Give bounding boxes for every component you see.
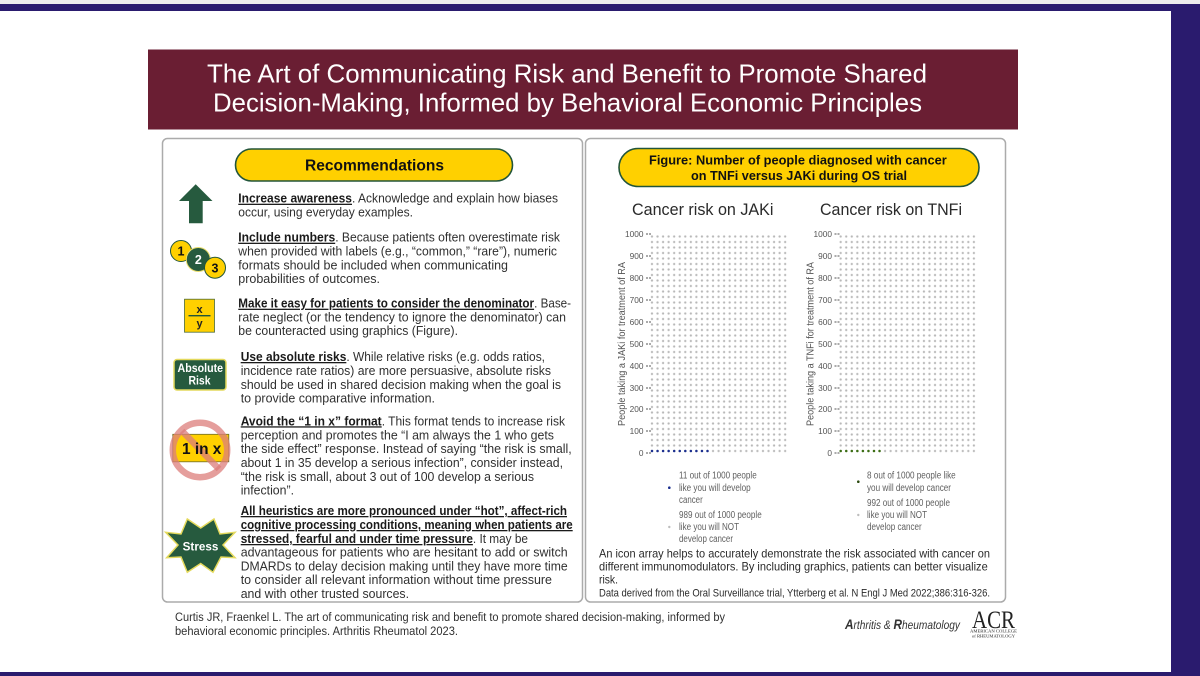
chart title: JAKi: Cancer risk on JAKi (632, 201, 774, 219)
text: avoid 1 in x: Avoid the “1 in x” format. This format tends to increase risk (241, 413, 566, 428)
heading: figure (619, 148, 979, 186)
icon array: TNFi (838, 234, 977, 454)
axis ticks: TNFi (814, 229, 840, 458)
legend: JAKi: develop cancer (679, 534, 734, 545)
heading: figure: on TNFi versus JAKi during OS trial (691, 168, 907, 183)
text: heuristics: All heuristics are more pronounced under “hot”, affect-rich (241, 503, 567, 518)
logo: ACR: AMERICAN COLLEGE (970, 628, 1017, 634)
legend: TNFi: you will develop cancer (867, 483, 952, 494)
text: avoid 1 in x (241, 413, 572, 498)
heading: recommendations: Recommendations (305, 158, 444, 174)
legend: JAKi: cancer (679, 495, 703, 506)
axis ticks: JAKi: 800 (630, 273, 644, 283)
panel: recommendations (162, 138, 582, 602)
text: include numbers: probabilities of outcomes. (238, 271, 380, 286)
legend: JAKi: 989 out of 1000 people (679, 510, 762, 521)
text: increase awareness: occur, using everyday examples. (238, 205, 413, 220)
text: figure caption: risk. (599, 573, 618, 587)
text: avoid 1 in x: about 1 in 35 develop a serious infection”, consider instead, (241, 455, 563, 470)
text: heuristics: cognitive processing conditions, meaning when patients are (241, 517, 573, 532)
text: citation: behavioral economic principles. Arthritis Rheumatol 2023. (175, 624, 458, 638)
legend: TNFi: 992 out of 1000 people (867, 498, 950, 509)
legend: JAKi: like you will develop (679, 483, 751, 494)
axis ticks: TNFi: 0 (827, 448, 832, 458)
panel: figure (586, 138, 1006, 602)
icon: absolute risk badge: Absolute (178, 362, 224, 375)
icon: numbers 1 2 3: 2 (195, 253, 202, 267)
text: avoid 1 in x: infection”. (241, 482, 294, 498)
heading: recommendations (236, 149, 512, 181)
text: heuristics (241, 503, 573, 601)
icon: numbers 1 2 3: 1 (178, 244, 185, 258)
axis ticks: JAKi: 300 (630, 383, 644, 393)
text: avoid 1 in x: the side effect” response. Instead of saying “the risk is small, (241, 441, 572, 456)
text: include numbers (237, 230, 561, 286)
text: denominator: rate neglect (or the tendency to ignore the denominator) can (238, 310, 566, 324)
axis ticks: JAKi: 700 (630, 295, 644, 305)
text: heuristics: DMARDs to delay decision making until they have more time (241, 558, 568, 574)
logo: ACR: of RHEUMATOLOGY (972, 634, 1016, 638)
text: citation: Curtis JR, Fraenkel L. The art of communicating risk and benefit to promote shared decision-making, informed by (175, 610, 726, 624)
text: absolute risks: should be used in shared decision making when the goal is (241, 377, 561, 392)
legend: JAKi: 11 out of 1000 people (679, 471, 757, 482)
axis ticks: TNFi: 600 (818, 317, 832, 327)
text: include numbers: Include numbers. Because patients often overestimate risk (238, 230, 561, 245)
text: denominator: Make it easy for patients to consider the denominator. Base- (238, 296, 571, 311)
axis ticks: JAKi: 1000 (625, 229, 644, 239)
text: heuristics: stressed, fearful and under time pressure. It may be (241, 531, 528, 546)
icon: stress starburst (166, 519, 235, 572)
icon: no 1 in x (173, 423, 229, 477)
text: absolute risks: incidence rate ratios) are more persuasive, absolute risks (241, 363, 551, 378)
text: figure caption: different immunomodulators. By including graphics, patients can better visualize (599, 560, 988, 574)
text: avoid 1 in x: perception and promotes the “I am always the 1 who gets (241, 427, 554, 442)
icon: absolute risk badge: Risk (188, 374, 211, 388)
text: denominator (238, 296, 571, 338)
icon: x over y fraction: x (196, 304, 203, 316)
chart: cancer risk on JAKi (617, 201, 788, 545)
text: figure caption (599, 547, 990, 600)
icon: up arrow (179, 184, 212, 223)
legend: TNFi: develop cancer (867, 522, 922, 533)
axis ticks: JAKi: 900 (630, 251, 644, 261)
text: absolute risks: Use absolute risks. While relative risks (e.g. odds ratios, (241, 349, 545, 364)
axis ticks: TNFi: 200 (818, 404, 832, 414)
legend: JAKi (668, 471, 762, 545)
text: figure caption: An icon array helps to accurately demonstrate the risk associated with cancer on (599, 547, 990, 561)
text: citation (175, 610, 726, 638)
legend: TNFi: 8 out of 1000 people like (867, 471, 956, 482)
text: increase awareness: Increase awareness. Acknowledge and explain how biases (238, 191, 558, 206)
title banner (148, 50, 1018, 130)
icon: x over y fraction (184, 299, 214, 332)
text: figure caption: Data derived from the Oral Surveillance trial, Ytterberg et al. N Engl J Med 2022;386:316-326. (599, 588, 990, 600)
axis ticks: JAKi: 400 (630, 361, 644, 371)
title banner: The Art of Communicating Risk and Benefit to Promote Shared (207, 59, 927, 89)
title banner: Decision-Making, Informed by Behavioral Economic Principles (213, 88, 922, 118)
icon: no 1 in x: 1 in x (182, 441, 222, 458)
icon: absolute risk badge (174, 360, 226, 390)
chart: cancer risk on TNFi (806, 201, 977, 533)
axis ticks: JAKi (625, 229, 651, 458)
text: absolute risks: to provide comparative information. (241, 390, 435, 406)
axis ticks: JAKi: 0 (639, 448, 644, 458)
chart title: TNFi: Cancer risk on TNFi (820, 201, 962, 219)
icon array: JAKi (649, 234, 788, 454)
text: heuristics: advantageous for patients who are hesitant to add or switch (241, 544, 568, 560)
axis ticks: TNFi: 1000 (814, 229, 832, 239)
axis ticks: TNFi: 900 (818, 251, 832, 261)
legend: TNFi (857, 471, 956, 533)
axis ticks: JAKi: 100 (630, 426, 644, 436)
legend: JAKi: like you will NOT (679, 522, 739, 533)
axis label: JAKi: People taking a JAKi for treatment of RA (617, 262, 628, 426)
text: include numbers: formats should be included when communicating (238, 258, 508, 272)
axis ticks: TNFi: 300 (818, 383, 832, 393)
icon: x over y fraction: y (196, 318, 203, 330)
axis label: TNFi: People taking a TNFi for treatment of RA (806, 262, 816, 426)
icon: stress starburst: Stress (183, 540, 219, 554)
axis ticks: TNFi: 400 (818, 361, 832, 371)
heading: figure: Figure: Number of people diagnosed with cancer (649, 152, 947, 167)
text: heuristics: to consider all relevant information without time pressure (241, 572, 552, 587)
icon: numbers 1 2 3 (170, 240, 226, 278)
axis ticks: TNFi: 100 (818, 426, 832, 436)
logo: Arthritis and Rheumatology: Arthritis & Rheumatology (844, 616, 961, 632)
text: increase awareness (238, 191, 558, 220)
axis ticks: TNFi: 800 (818, 273, 832, 283)
text: denominator: be counteracted using graphics (Figure). (238, 323, 458, 338)
axis ticks: JAKi: 500 (630, 339, 644, 349)
icon: numbers 1 2 3: 3 (212, 262, 219, 276)
axis ticks: TNFi: 500 (818, 339, 832, 349)
axis ticks: TNFi: 700 (818, 295, 832, 305)
axis ticks: JAKi: 200 (630, 404, 644, 414)
text: avoid 1 in x: “the risk is small, about 3 out of 100 develop a serious (241, 469, 534, 484)
text: include numbers: when provided with labels (e.g., “common,” “rare”), numeric (237, 244, 558, 258)
text: absolute risks (241, 349, 561, 406)
text: heuristics: and with other trusted sources. (241, 586, 409, 601)
legend: TNFi: like you will NOT (867, 510, 927, 521)
axis ticks: JAKi: 600 (630, 317, 644, 327)
logo: ACR: ACR (972, 607, 1015, 634)
